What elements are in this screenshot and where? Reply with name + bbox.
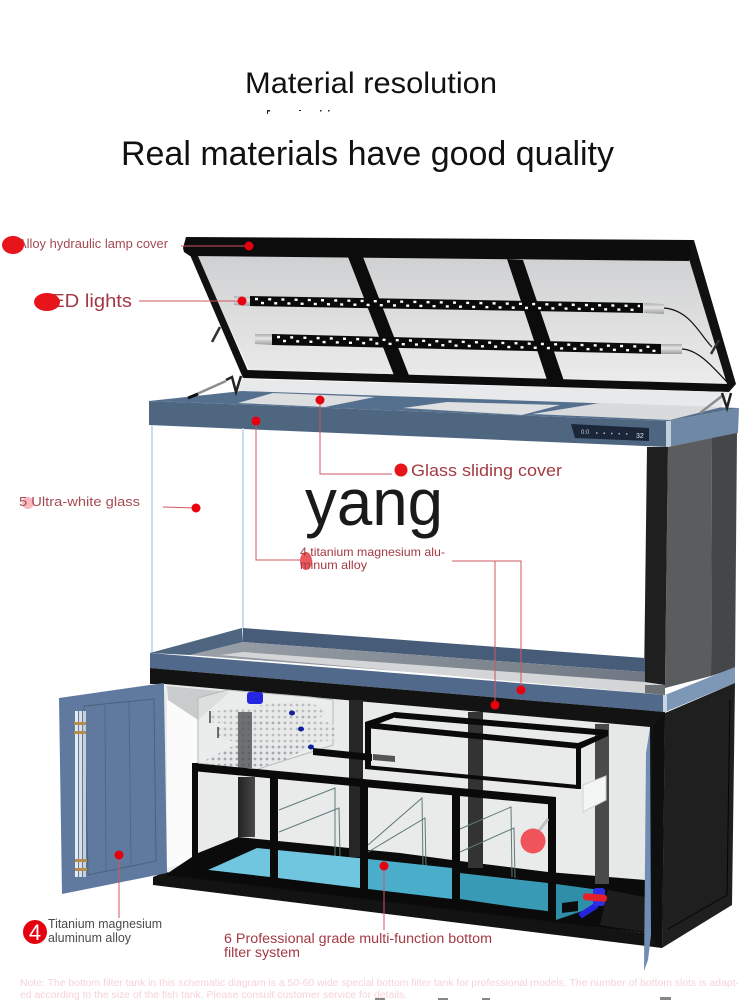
- stacked filter trays: [198, 690, 335, 770]
- label 6: filter system: 6 Professional grade multi-function bottom: [224, 931, 492, 946]
- footnote: Note: The bottom filter tank in this schematic diagram is a 50-60 wide special bottom filter tank for professional models. The number of bottom slots is adapt-: [20, 978, 739, 989]
- callout lines and dots: [114, 242, 526, 930]
- plumbing valve: [562, 888, 607, 916]
- title: material resolution: Material resolution: [245, 67, 497, 100]
- watermark: yang: yang: [305, 465, 443, 539]
- label 4: door material: [23, 917, 162, 945]
- glass tank and right pillar: [152, 425, 737, 688]
- label 6: filter system: [224, 931, 492, 960]
- label 4: door material: aluminum alloy: [48, 931, 132, 945]
- control panel: 0:0: [581, 430, 590, 436]
- LED light bars: [234, 296, 728, 383]
- upper filter frame: [365, 712, 608, 812]
- control panel: 32: [636, 433, 644, 440]
- cabinet: [150, 668, 735, 948]
- water: [208, 848, 600, 920]
- stray marks under title: [267, 110, 330, 114]
- stray marks at bottom edge: [375, 997, 671, 1000]
- right door edge: [644, 728, 651, 971]
- open left door: [59, 683, 167, 894]
- hydraulic supports: [188, 327, 731, 413]
- upper frame with glass sliding cover: [149, 391, 739, 447]
- label 4: door material: 4: [29, 920, 41, 945]
- control panel: [571, 424, 649, 441]
- label 4: titanium magnesium alloy: minum alloy: [300, 558, 367, 572]
- label 2: LED lights: LED lights: [40, 290, 132, 311]
- footnote: [20, 978, 739, 1000]
- sump baffles: [279, 788, 515, 878]
- red float ball: [520, 819, 548, 854]
- open lamp cover: [183, 237, 736, 407]
- aquarium illustration: [59, 237, 739, 971]
- label 5: ultra-white glass: 5 Ultra-white glass: [19, 494, 141, 509]
- interior posts: [238, 700, 609, 884]
- label 4: titanium magnesium alloy: [300, 545, 445, 572]
- label 3: glass sliding cover: Glass sliding cover: [411, 461, 562, 480]
- bottom filter frame: [192, 748, 556, 920]
- label 1: lamp cover: Alloy hydraulic lamp cover: [18, 236, 169, 251]
- label 6: filter system: filter system: [224, 945, 300, 960]
- subtitle: real materials: Real materials have good quality: [121, 135, 614, 173]
- label 4: titanium magnesium alloy: 4 titanium magnesium alu-: [300, 545, 445, 559]
- label 4: door material: Titanium magnesium: [48, 917, 162, 931]
- lower rim: [150, 628, 735, 712]
